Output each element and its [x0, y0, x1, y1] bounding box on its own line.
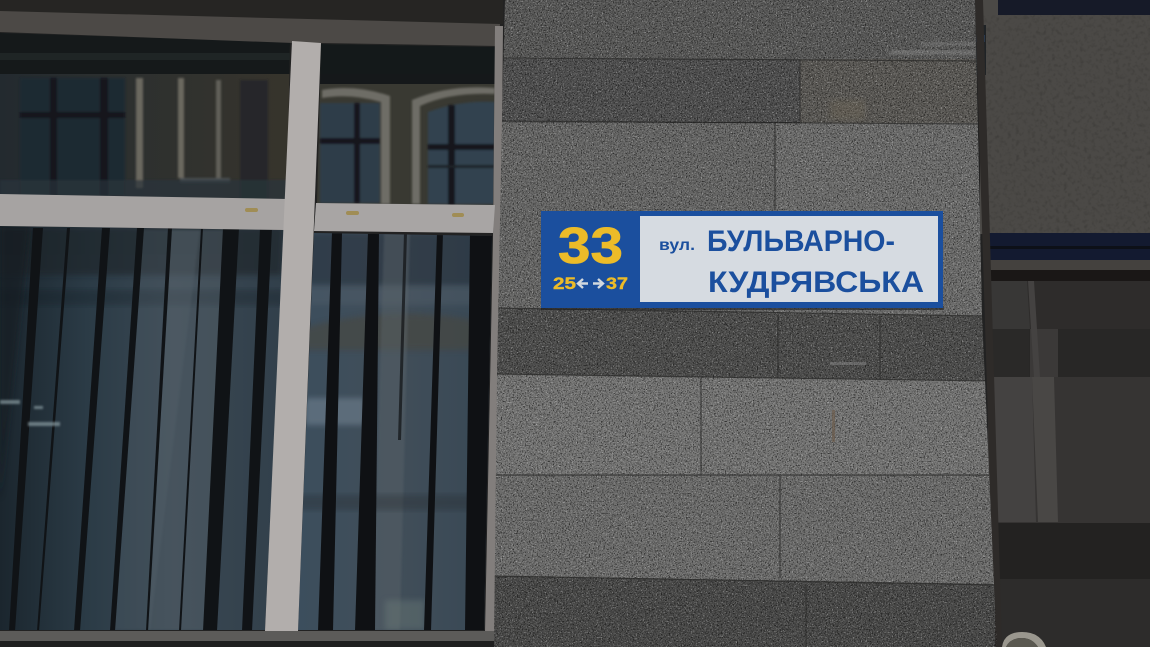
stone joints: [493, 58, 997, 647]
panel: right building wall: [976, 0, 1150, 647]
window frame right side: [485, 26, 503, 632]
brass latch screws: [245, 208, 464, 217]
upper right glass pane with reflections: [315, 44, 497, 207]
lower right glass pane with vertical blinds: [296, 233, 494, 633]
sign shadow: [541, 306, 944, 310]
house number: 33: [558, 217, 623, 274]
granite courses: [490, 0, 995, 647]
reflected lights: [0, 400, 60, 426]
upper plaster wall: [980, 0, 1150, 234]
blind shadows: [318, 233, 493, 631]
window left transom: [0, 194, 288, 230]
corner shadow edge: [975, 0, 1002, 647]
granite speckle: [490, 0, 1000, 647]
neighbouring house numbers: 37: [606, 274, 628, 293]
grey ledge: [986, 260, 1150, 272]
window sill: [0, 631, 502, 641]
sign blue plate: [541, 211, 943, 308]
street type label: вул.: [659, 237, 695, 254]
neighbouring house numbers: [553, 274, 628, 293]
panel: granite wall: [490, 0, 1002, 647]
sign white panel: [640, 216, 938, 302]
upper left glass pane with reflections: [0, 30, 295, 205]
window frame top: [0, 11, 500, 46]
street name line one: БУЛЬВАРНО-: [707, 225, 895, 258]
neighbouring house numbers: 25: [553, 274, 576, 293]
lower stone panels: [988, 281, 1150, 647]
window central mullion: [265, 41, 321, 631]
wall fixture at corner: [976, 25, 986, 75]
top blue band: [998, 0, 1150, 15]
blind shadows: [9, 228, 272, 631]
panel: window: [0, 0, 503, 647]
rust stains and light streaks: [830, 42, 975, 442]
street name line two: КУДРЯВСЬКА: [708, 266, 924, 299]
window right transom: [314, 203, 495, 233]
window lintel shadow: [0, 0, 503, 24]
street sign: [541, 211, 944, 310]
blue moulding: [985, 233, 1150, 260]
lower left glass pane with vertical blinds: [0, 226, 290, 631]
round lamp at bottom: [1002, 632, 1046, 647]
